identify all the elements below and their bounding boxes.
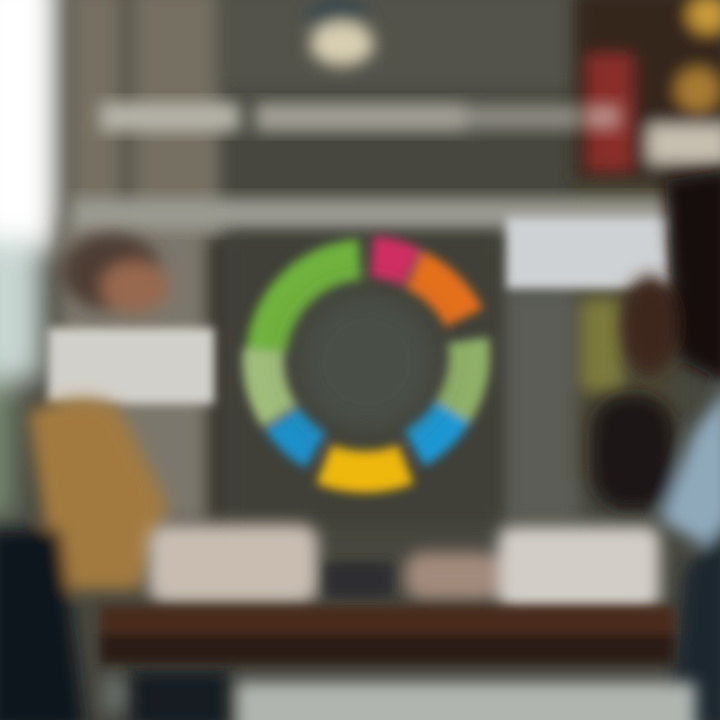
floor — [102, 675, 696, 720]
right hands and papers — [405, 526, 660, 610]
ceiling lamp — [308, 0, 374, 66]
orange segment — [414, 270, 464, 318]
subtitle band — [72, 198, 672, 230]
callout left — [48, 328, 214, 404]
upper right shelf with red object and lights — [575, 0, 720, 180]
callout top right — [506, 217, 670, 289]
device on table — [325, 562, 393, 598]
left hands and papers — [148, 524, 318, 604]
light green right segment — [452, 340, 469, 412]
pale green left segment — [264, 350, 280, 416]
yellow segment — [324, 464, 406, 472]
left blue segment — [282, 418, 316, 450]
left person — [0, 234, 230, 720]
right person — [592, 170, 720, 720]
right blue segment — [414, 412, 452, 448]
donut centre — [297, 292, 437, 432]
wooden columns — [60, 0, 675, 525]
pink segment — [372, 257, 412, 268]
green segment — [267, 260, 360, 350]
donut chart — [264, 257, 469, 472]
table — [100, 606, 675, 664]
window on the left — [0, 0, 58, 520]
blurred title — [100, 102, 621, 132]
chart backing panel — [228, 235, 503, 525]
